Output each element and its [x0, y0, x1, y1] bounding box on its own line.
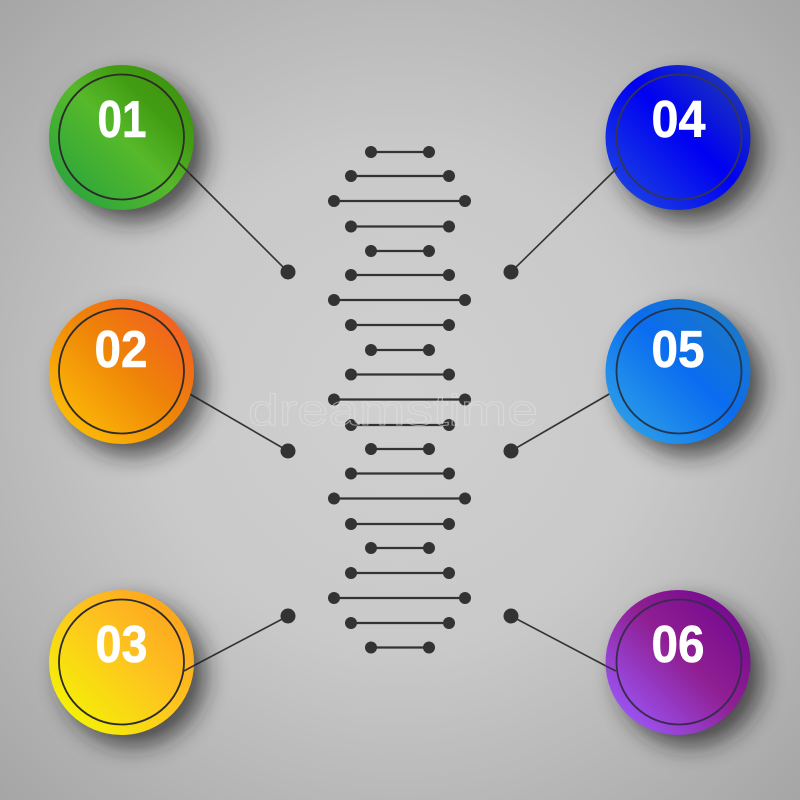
circle 06 — [606, 590, 762, 746]
connector 3 — [195, 608, 296, 665]
rung 11 — [328, 394, 471, 406]
rung 15 — [328, 492, 471, 504]
rung 19 — [328, 592, 471, 604]
connector 1 — [190, 174, 296, 280]
rung 18 — [345, 567, 455, 579]
rung 7 — [328, 294, 471, 306]
rung 6 — [345, 269, 455, 281]
rung 2 — [345, 170, 455, 182]
connector 4 — [504, 175, 610, 280]
circle 05 — [606, 299, 762, 455]
rung 12 — [345, 419, 455, 431]
circle 02: 02 — [94, 321, 148, 379]
rung 17 — [365, 542, 435, 554]
rung 21 — [365, 642, 435, 654]
rung 8 — [345, 319, 455, 331]
rung 13 — [365, 443, 435, 455]
circle 03 — [49, 590, 205, 746]
circle 02 — [49, 299, 205, 455]
rung 1 — [365, 146, 435, 158]
DNA helix — [328, 146, 471, 654]
rung 20 — [345, 617, 455, 629]
circle 01 — [49, 65, 205, 221]
circle 06: 06 — [652, 616, 704, 674]
circle 03: 03 — [96, 616, 148, 674]
connector 5 — [504, 393, 611, 458]
rung 9 — [365, 344, 435, 356]
circle 04 — [606, 65, 762, 221]
circle 05: 05 — [652, 321, 704, 379]
watermark: dreamstime — [248, 386, 538, 435]
connector 2 — [188, 393, 296, 458]
rung 5 — [365, 245, 435, 257]
rung 14 — [345, 468, 455, 480]
circle 01: 01 — [98, 91, 146, 149]
rung 4 — [345, 220, 455, 232]
connector 6 — [504, 608, 606, 666]
circle 04: 04 — [652, 91, 706, 149]
rung 3 — [328, 195, 471, 207]
rung 10 — [345, 368, 455, 380]
rung 16 — [345, 518, 455, 530]
